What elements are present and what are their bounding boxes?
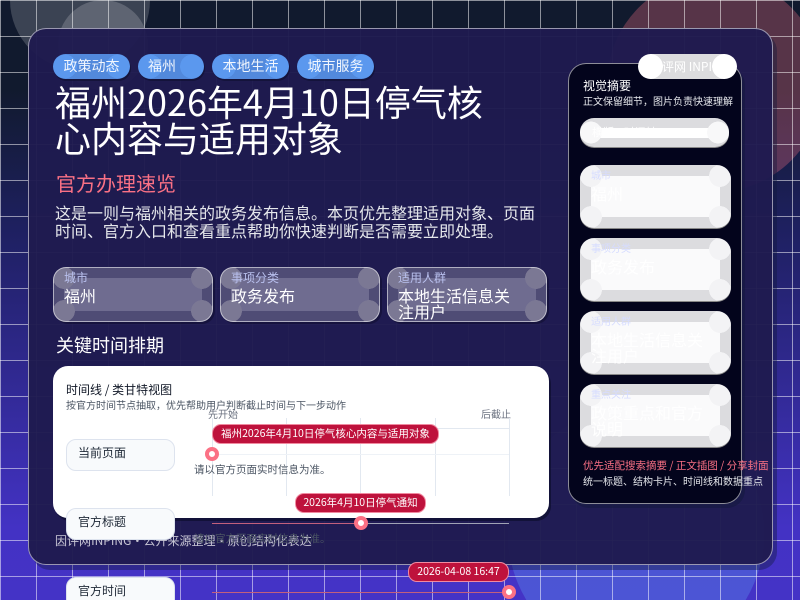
footer source line: 因评网 INPING · 公开来源整理 · 原创结构化表达 <box>55 532 312 549</box>
gantt grid <box>212 418 510 593</box>
note: row 1: 请以官方页面实时信息为准。 <box>194 462 330 477</box>
section heading: 关键时间排期: 关键时间排期 <box>56 332 164 358</box>
axis label start: 先开始 <box>208 406 238 421</box>
pill: brand <box>638 54 737 79</box>
side subheading: 正文保留细节，图片负责快速理解 <box>583 93 733 108</box>
metric card: 适用人群: 本地生活信息关注用户 <box>398 283 510 323</box>
summary card: 事项分类: 政务发布 <box>591 254 655 278</box>
bar: official title <box>295 493 426 513</box>
background circle: pink <box>607 0 800 192</box>
bar: current page <box>212 424 439 444</box>
metric card: 城市: 城市 <box>64 269 88 286</box>
note: row 2: 请以官方页面实时信息为准。 <box>194 531 330 546</box>
summary card: 城市: 城市 <box>591 167 611 182</box>
background circle: blue <box>508 406 764 600</box>
summary card: 事项分类 <box>580 238 731 301</box>
row label: 当前页面: 当前页面 <box>78 444 126 461</box>
marker: official time <box>502 585 516 599</box>
timeline subtitle: 按官方时间节点抽取，优先帮助用户判断截止时间与下一步动作 <box>66 397 346 412</box>
side heading: 视觉摘要 <box>583 77 631 94</box>
summary card: 城市: 福州 <box>591 181 623 205</box>
metric card: 事项分类: 政务发布 <box>231 283 295 307</box>
intro paragraph: 这是一则与福州相关的政务发布信息。本页优先整理适用对象、页面时间、官方入口和查看重点帮助你快速判断是否需要立即处理。 <box>55 200 535 242</box>
pill: format <box>580 118 729 147</box>
tag: 城市服务 <box>297 54 374 79</box>
row label: 当前页面 <box>66 439 175 471</box>
marker: current page <box>205 447 219 461</box>
row label: 官方标题 <box>66 508 175 540</box>
metric card: 适用人群: 适用人群 <box>398 269 446 286</box>
summary card: 重点关注: 重点关注 <box>591 386 631 401</box>
summary card: 重点关注: 政策重点和官方说明 <box>591 400 703 440</box>
subtitle: 官方办理速览 <box>56 168 176 197</box>
timeline title: 时间线 / 类甘特视图 <box>66 381 172 398</box>
row label: 官方时间 <box>66 577 175 600</box>
side note: white: 统一标题、结构卡片、时间线和数据重点 <box>583 473 763 488</box>
tag: 福州: 福州 <box>148 56 176 76</box>
tag: 福州 <box>138 54 204 79</box>
bar: official time: 2026-04-08 16:47 <box>417 564 500 579</box>
marker: official title <box>354 516 368 530</box>
side panel: visual summary <box>568 63 742 504</box>
summary card: 适用人群: 本地生活信息关注用户 <box>591 327 703 367</box>
tag: 本地生活 <box>212 54 289 79</box>
pill: format: 横版 · 时间轴 <box>592 124 657 140</box>
metric card: 城市 <box>53 267 213 322</box>
bar: current page: 福州2026年4月10日停气核心内容与适用对象 <box>221 426 430 441</box>
background circle: grey small <box>58 0 148 90</box>
summary card: 适用人群: 适用人群 <box>591 313 631 328</box>
title: 福州2026年4月10日停气核心内容与适用对象 <box>55 75 483 163</box>
metric card: 事项分类 <box>220 267 380 322</box>
background circle: grey large <box>10 0 150 70</box>
side note: pink: 优先适配搜索摘要 / 正文插图 / 分享封面 <box>583 458 769 473</box>
metric card: 事项分类: 事项分类 <box>231 269 279 286</box>
timeline panel <box>53 366 549 518</box>
tag: 政策动态: 政策动态 <box>64 56 120 76</box>
summary card: 重点关注 <box>580 384 731 447</box>
pill: brand: 因评网 INPING <box>650 58 729 75</box>
bar: official title: 2026年4月10日停气通知 <box>303 495 418 510</box>
summary card: 城市 <box>580 165 731 228</box>
summary card: 适用人群 <box>580 311 731 374</box>
metric card: 城市: 福州 <box>64 283 96 307</box>
summary card: 事项分类: 事项分类 <box>591 240 631 255</box>
metric card: 适用人群 <box>387 267 547 322</box>
bar: official time <box>408 562 509 582</box>
tag: 城市服务: 城市服务 <box>308 56 364 76</box>
row label: 官方时间: 官方时间 <box>78 582 126 599</box>
tag: 本地生活: 本地生活 <box>222 56 278 76</box>
row label: 官方标题: 官方标题 <box>78 513 126 530</box>
tag: 政策动态 <box>53 54 130 79</box>
axis label end: 后截止 <box>481 406 511 421</box>
